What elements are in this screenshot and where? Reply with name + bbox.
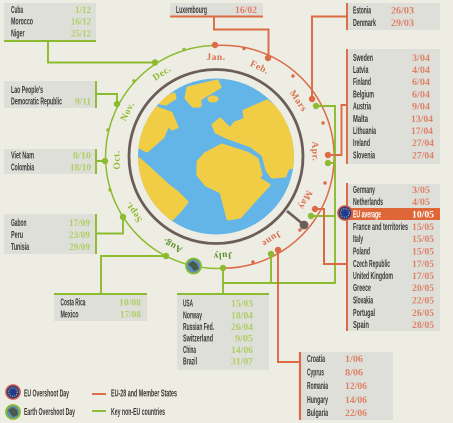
panel: Costa Rica, Mexico: 10/08	[119, 298, 141, 308]
panel: Cuba, Morocco, Niger: Niger	[11, 28, 24, 40]
globe illustration	[125, 70, 305, 244]
month labels: Apr.	[309, 141, 320, 162]
panel: Germany to Spain, with EU average	[312, 183, 440, 331]
panel: Viet Nam, Colombia	[4, 149, 108, 174]
panel: Germany to Spain, with EU average: Czech Republic	[353, 258, 390, 270]
panel: Estonia, Denmark	[309, 3, 440, 102]
panel: Cuba, Morocco, Niger: Cuba	[11, 4, 23, 16]
panel: Sweden to Slovenia	[325, 49, 440, 164]
panel: Gabon, Peru, Tunisia: Gabon	[11, 217, 26, 229]
month labels: June	[259, 228, 283, 248]
panel: USA, Norway, Russian Fed., Switzerland, China, Brazil: Switzerland	[183, 332, 213, 344]
panel: Estonia, Denmark: Denmark	[353, 17, 376, 29]
panel: Luxembourg: 16/02	[235, 6, 257, 16]
panel: Sweden to Slovenia: 6/04	[412, 90, 430, 100]
panel: Germany to Spain, with EU average: 10/05	[412, 210, 434, 220]
panel: Sweden to Slovenia: 17/04	[411, 127, 433, 137]
panel: Cuba, Morocco, Niger: Morocco	[11, 16, 33, 28]
panel: Cuba, Morocco, Niger	[4, 3, 158, 66]
legend: EU Overshoot Day	[24, 388, 69, 400]
panel: Sweden to Slovenia: 9/04	[412, 102, 430, 112]
panel: Sweden to Slovenia: 4/04	[412, 66, 430, 76]
panel: Croatia to Bulgaria: Hungary	[307, 394, 328, 406]
panel: Viet Nam, Colombia: Colombia	[11, 162, 34, 174]
panel: Germany to Spain, with EU average: 15/05	[412, 223, 434, 233]
panel: Cuba, Morocco, Niger: 16/12	[71, 18, 91, 28]
panel: Sweden to Slovenia: Belgium	[353, 88, 374, 100]
panel: Gabon, Peru, Tunisia: 29/09	[69, 243, 90, 253]
panel: Estonia, Denmark: 26/03	[391, 6, 414, 16]
panel: Cuba, Morocco, Niger: 25/12	[71, 30, 91, 40]
panel: Germany to Spain, with EU average: 4/05	[412, 198, 430, 208]
legend	[6, 385, 177, 419]
panel: Croatia to Bulgaria: 12/06	[345, 382, 367, 392]
panel: Viet Nam, Colombia: Viet Nam	[11, 150, 34, 162]
panel: Sweden to Slovenia: 27/04	[412, 139, 434, 149]
month labels: Jan.	[206, 53, 226, 63]
panel: Germany to Spain, with EU average: EU average	[353, 208, 381, 220]
panel: Sweden to Slovenia: 3/04	[412, 54, 430, 64]
panel: Sweden to Slovenia: Finland	[353, 76, 371, 88]
month labels: May	[296, 189, 313, 211]
panel: Sweden to Slovenia: 6/04	[412, 78, 430, 88]
month labels: July	[213, 249, 233, 260]
panel: Viet Nam, Colombia: 18/10	[70, 164, 91, 174]
legend: Key non-EU countries	[111, 406, 165, 418]
panel: Germany to Spain, with EU average: 17/05	[412, 272, 434, 282]
panel: Sweden to Slovenia: 13/04	[411, 115, 433, 125]
panel: Germany to Spain, with EU average: 26/05	[412, 309, 434, 319]
panel: Cuba, Morocco, Niger: 1/12	[75, 6, 91, 16]
panel: Lao People's Democratic Republic	[4, 81, 120, 108]
panel: Estonia, Denmark: 29/03	[391, 19, 414, 29]
month labels: Mars	[287, 89, 308, 114]
panel: Germany to Spain, with EU average: 17/05	[412, 260, 434, 270]
calendar ring: EU and member states arc	[216, 45, 334, 268]
panel: USA, Norway, Russian Fed., Switzerland, China, Brazil: 15/03	[231, 300, 253, 310]
legend: Earth Overshoot Day	[24, 406, 75, 418]
panel: Croatia to Bulgaria: 1/06	[345, 355, 363, 365]
panel: Luxembourg: Luxembourg	[176, 4, 207, 16]
panel: Sweden to Slovenia: Lithuania	[353, 125, 376, 137]
panel: USA, Norway, Russian Fed., Switzerland, China, Brazil: China	[183, 344, 196, 356]
month labels: Oct.	[112, 150, 123, 170]
panel: Sweden to Slovenia: Malta	[353, 113, 368, 125]
panel: Croatia to Bulgaria: Croatia	[307, 353, 325, 365]
panel: Sweden to Slovenia: Austria	[353, 100, 371, 112]
panel: Costa Rica, Mexico: Mexico	[60, 308, 78, 320]
month labels: Sept.	[124, 199, 145, 224]
panel: USA, Norway, Russian Fed., Switzerland, China, Brazil: 14/06	[231, 346, 253, 356]
panel: Lao People's Democratic Republic: 9/11	[75, 98, 91, 108]
panel: Gabon, Peru, Tunisia: 17/09	[69, 219, 90, 229]
panel: Germany to Spain, with EU average: Greece	[353, 282, 371, 294]
panel: Gabon, Peru, Tunisia: 23/09	[69, 231, 90, 241]
panel: Germany to Spain, with EU average: 15/05	[412, 248, 434, 258]
panel: USA, Norway, Russian Fed., Switzerland, China, Brazil: Norway	[183, 310, 202, 322]
month labels: Aug.	[161, 236, 185, 254]
panel: Sweden to Slovenia: Slovenia	[353, 150, 375, 162]
calendar ring: non-EU arc	[106, 46, 223, 268]
panel: Croatia to Bulgaria: Bulgaria	[307, 407, 328, 419]
panel: Estonia, Denmark: Estonia	[353, 4, 371, 16]
panel: USA, Norway, Russian Fed., Switzerland, China, Brazil: USA	[183, 298, 193, 310]
panel: Croatia to Bulgaria: 14/06	[345, 396, 367, 406]
panel: USA, Norway, Russian Fed., Switzerland, China, Brazil: 31/07	[231, 358, 253, 368]
panel: Germany to Spain, with EU average: Slovakia	[353, 294, 373, 306]
panel: Viet Nam, Colombia: 8/10	[73, 152, 91, 162]
legend: EU-28 and Member States	[111, 388, 177, 400]
panel: Lao People's Democratic Republic: Lao People's	[11, 84, 43, 96]
panel: Germany to Spain, with EU average: 15/05	[412, 235, 434, 245]
panel: Lao People's Democratic Republic: Democratic Republic	[11, 96, 62, 108]
panel: Croatia to Bulgaria: 22/06	[345, 409, 367, 419]
month labels: Feb.	[248, 59, 270, 77]
panel: Luxembourg	[170, 3, 271, 61]
panel: Gabon, Peru, Tunisia: Tunisia	[11, 241, 29, 253]
panel: USA, Norway, Russian Fed., Switzerland, China, Brazil	[177, 103, 335, 370]
panel: Germany to Spain, with EU average: Netherlands	[353, 196, 383, 208]
EU overshoot pointer	[287, 211, 308, 229]
icon: EU flag marker on panel	[338, 206, 352, 220]
panel: USA, Norway, Russian Fed., Switzerland, China, Brazil: 18/04	[231, 312, 253, 322]
panel: Germany to Spain, with EU average: 3/05	[412, 186, 430, 196]
panel: Germany to Spain, with EU average: Portugal	[353, 307, 375, 319]
panel: Germany to Spain, with EU average: Italy	[353, 233, 363, 245]
panel: Gabon, Peru, Tunisia: Peru	[11, 229, 23, 241]
panel: Costa Rica, Mexico: Costa Rica	[60, 296, 86, 308]
panel: USA, Norway, Russian Fed., Switzerland, China, Brazil: Russian Fed.	[183, 321, 214, 333]
panel: Croatia to Bulgaria: Cyprus	[307, 366, 324, 378]
panel: Sweden to Slovenia: Sweden	[353, 52, 373, 64]
panel: Costa Rica, Mexico: 17/08	[120, 310, 141, 320]
panel: Sweden to Slovenia: Ireland	[353, 137, 370, 149]
panel: Germany to Spain, with EU average: Germany	[353, 184, 375, 196]
panel: Germany to Spain, with EU average: 20/05	[412, 284, 434, 294]
panel: Germany to Spain, with EU average: Spain	[353, 319, 369, 331]
panel: Gabon, Peru, Tunisia	[4, 214, 126, 254]
panel: Costa Rica, Mexico	[54, 253, 169, 321]
panel: USA, Norway, Russian Fed., Switzerland, China, Brazil: Brazil	[183, 356, 197, 368]
panel: Germany to Spain, with EU average: United Kingdom	[353, 270, 393, 282]
month labels	[112, 53, 320, 260]
month labels: Dec.	[151, 64, 173, 83]
panel: USA, Norway, Russian Fed., Switzerland, China, Brazil: 26/04	[231, 323, 253, 333]
panel: USA, Norway, Russian Fed., Switzerland, China, Brazil: 9/05	[235, 334, 253, 344]
icon: Earth overshoot marker on ring	[186, 258, 201, 274]
panel: Germany to Spain, with EU average: 22/05	[412, 296, 434, 306]
panel: Croatia to Bulgaria: Romania	[307, 380, 328, 392]
panel: Croatia to Bulgaria: 8/06	[345, 368, 363, 378]
panel: Sweden to Slovenia: Latvia	[353, 64, 369, 76]
panel: Croatia to Bulgaria	[275, 247, 393, 420]
month labels: Nov.	[119, 101, 137, 123]
panel: Germany to Spain, with EU average: Poland	[353, 246, 370, 258]
panel: Germany to Spain, with EU average: 28/05	[412, 321, 434, 331]
panel: Sweden to Slovenia: 27/04	[412, 152, 434, 162]
